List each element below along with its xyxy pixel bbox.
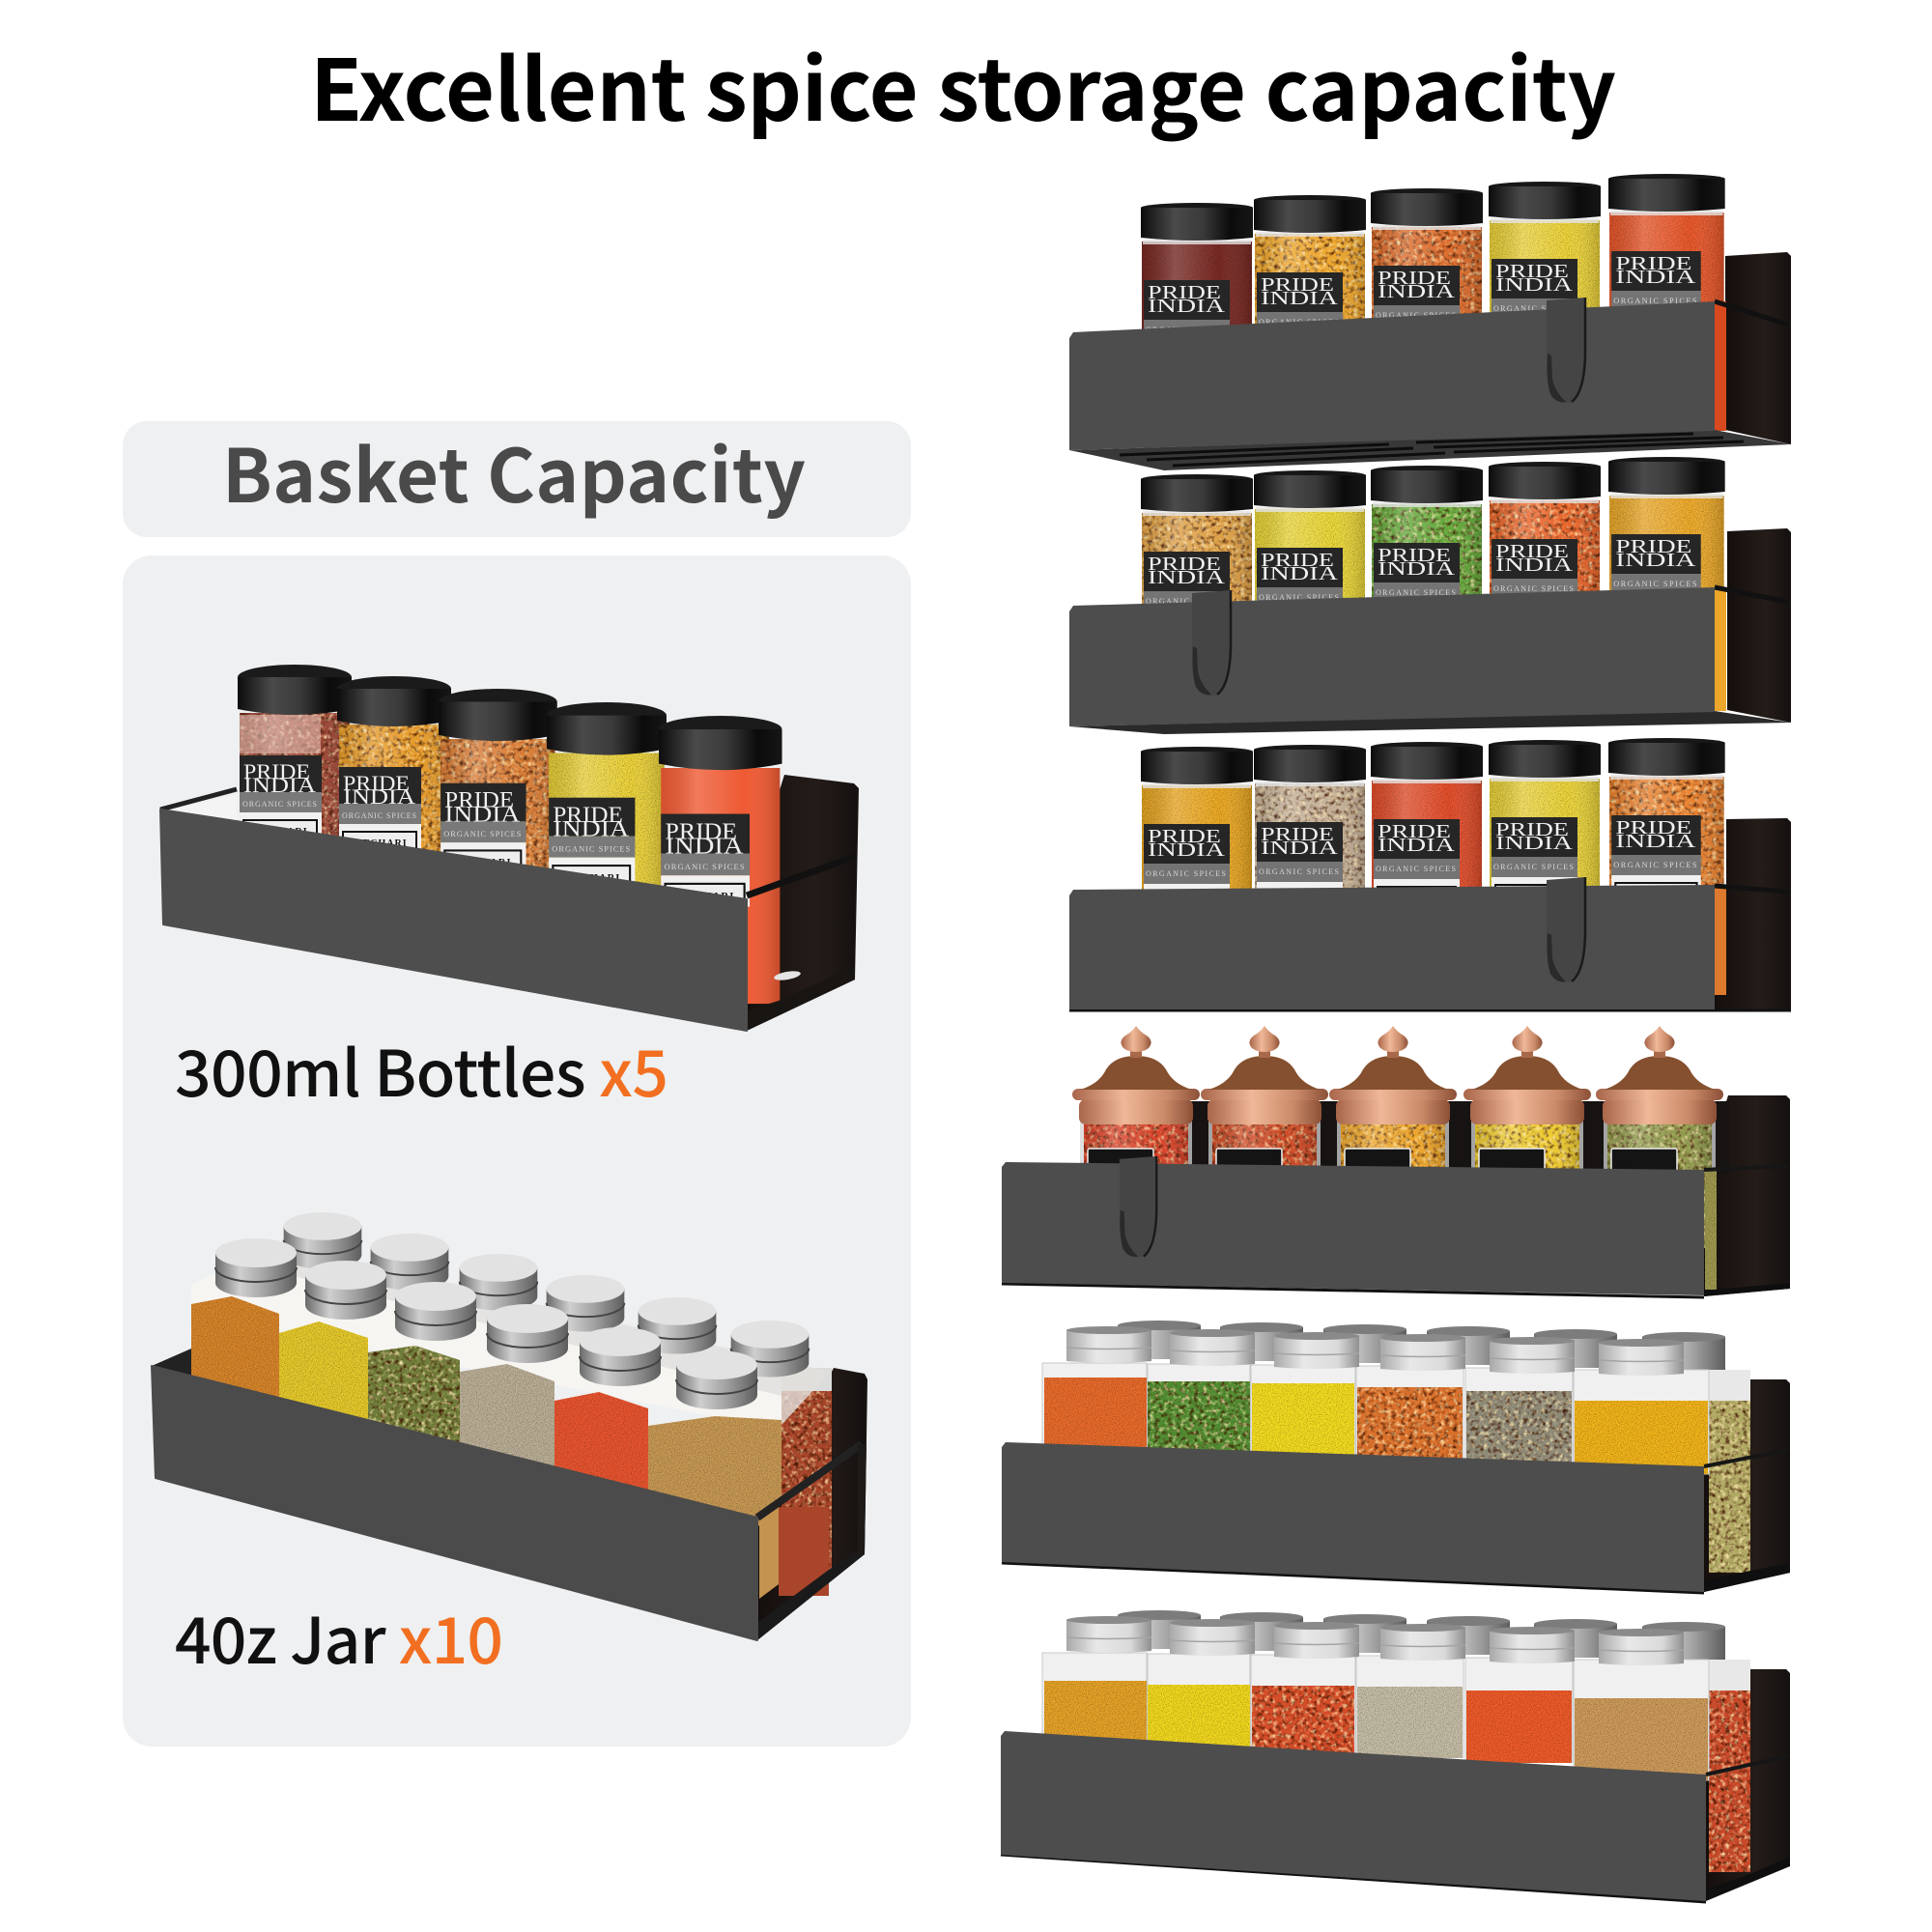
bottle: ORGANIC SPICES [1146,869,1227,878]
rack with 12 silver-lid jars [152,1212,867,1640]
bottle 5: ORGANIC SPICES [664,862,746,871]
rack E: twelve silver-lid square jars [1002,1321,1790,1593]
bottle: ORGANIC SPICES [1493,304,1575,313]
bottle 4: INDIA [553,816,629,841]
bottle: PRIDE [1615,817,1691,838]
bottle 2: ORGANIC SPICES [342,811,417,820]
bottle: PRIDE [1148,826,1221,847]
hook [1547,298,1585,403]
bottle: INDIA [1378,558,1456,580]
bottle: INDIA [1495,833,1574,854]
bottle: PRIDE [1495,261,1569,282]
bottle: INDIA [1495,274,1574,296]
bottle: ORGANIC SPICES [1146,597,1227,606]
bottle: ORGANIC SPICES [1376,311,1457,320]
bottle: KITCHARI [1624,891,1684,901]
bottle 1: PRIDE [243,759,310,783]
copper jar [1596,1026,1723,1248]
bottle 1 [238,665,352,877]
rack D: five copper-lid jars with hook [1002,1026,1790,1297]
bottle 3 [439,689,557,910]
bottle [1608,738,1725,902]
bottle: KITCHARI [1385,895,1443,905]
heading: Basket Capacity: Basket Capacity [222,417,806,524]
text: 300ml Bottles x5: 300ml Bottles x5 [175,1023,668,1116]
bottle 1: INDIA [243,773,316,797]
back row jars [280,1212,832,1577]
bottle [1141,203,1253,367]
bottle: PRIDE [1148,554,1221,575]
bottle 2 [337,676,451,889]
bottle [1608,457,1725,621]
bottle [1371,466,1483,630]
bottle: PRIDE [1378,268,1451,289]
bottle: PRIDE [1261,550,1334,571]
copper jar [1463,1026,1591,1248]
bottle: INDIA [1261,288,1339,309]
rack C: five black-lid bottles with hook [1069,738,1791,1010]
bottle 1: KITCHARI [250,827,308,838]
bottle: PRIDE [1261,274,1334,296]
bottle [1141,747,1253,911]
bottle: ORGANIC SPICES [1493,863,1575,871]
bottle 4: ORGANIC SPICES [552,844,631,853]
bottle 3: KITCHARI [452,858,512,868]
bottle [1608,174,1725,338]
bottle: ORGANIC SPICES [1376,588,1457,597]
hook [1120,1156,1156,1258]
bottle [1254,470,1366,635]
bottle 4 [547,702,667,925]
bottle: ORGANIC SPICES [1146,326,1227,334]
bottle: ORGANIC SPICES [1613,580,1698,588]
bottle: PRIDE [1615,536,1691,557]
bottle: ORGANIC SPICES [1613,861,1698,869]
bottle [1141,474,1253,639]
rack F: twelve silver-lid square jars [1001,1610,1790,1902]
copper jar [1329,1026,1457,1248]
bottle 4: PRIDE [553,802,623,827]
bottle: INDIA [1495,554,1574,576]
bottle: INDIA [1378,281,1456,302]
bottle: PRIDE [1495,541,1569,562]
back row lids [1118,1610,1725,1661]
bottle 1: ORGANIC SPICES [242,800,318,809]
bottle 2: PRIDE [343,771,410,795]
bottle: ORGANIC SPICES [1259,318,1340,327]
bottle: INDIA [1261,563,1339,584]
bottle: INDIA [1148,567,1226,588]
bottle: PRIDE [1615,253,1691,274]
bottle 3: PRIDE [444,788,514,812]
copper jar [1201,1026,1328,1248]
bottle 3: INDIA [444,802,521,826]
bottle: KITCHARI [1268,897,1326,908]
bottle [1489,462,1601,626]
bottle 5: INDIA [666,835,744,860]
bottle 3: ORGANIC SPICES [443,830,522,838]
bottle: PRIDE [1148,282,1221,303]
bottle: ORGANIC SPICES [1259,593,1340,602]
bottle: INDIA [1615,831,1696,852]
text: 4oz Jar x10: 40z Jar x10 [175,1590,503,1683]
bottle: INDIA [1615,267,1696,288]
title: Excellent spice storage capacity [310,23,1616,146]
front row jars [191,1238,781,1527]
bottle 4: KITCHARI [560,873,620,884]
bottle: INDIA [1261,838,1339,859]
bottle: ORGANIC SPICES [1613,297,1698,305]
bottle [1371,742,1483,906]
bottle: KITCHARI [1503,893,1561,903]
back row lids [1118,1321,1725,1371]
bottle: INDIA [1148,839,1226,861]
bottle [1371,188,1483,353]
bottle 5: PRIDE [666,819,737,844]
bottle [1254,195,1366,359]
bottle 2: KITCHARI [350,838,408,849]
rack B: five black-lid bottles with hook [1069,457,1791,734]
hook [1547,877,1585,982]
bottle: PRIDE [1378,821,1451,842]
panel: basket capacity heading [123,417,911,537]
bottle: PRIDE [1261,824,1334,845]
bottle 5: KITCHARI [672,891,735,902]
bottle: INDIA [1378,835,1456,856]
bottle: KITCHARI [1155,899,1213,910]
copper jar [1072,1026,1200,1248]
bottle: PRIDE [1495,819,1569,840]
bottle 5 [659,716,782,1004]
bottle: INDIA [1615,550,1696,571]
bottle: INDIA [1148,296,1226,317]
rack A: five black-lid bottles with hook [1069,174,1791,470]
bottle: PRIDE [1378,545,1451,566]
bottle [1254,745,1366,909]
bottle 2: INDIA [343,784,415,809]
front row jars [1042,1326,1709,1474]
hook [1192,590,1231,696]
bottle: ORGANIC SPICES [1376,865,1457,873]
rack with 5 black-lid bottles [160,665,859,1031]
bottle [1489,182,1601,346]
bottle: ORGANIC SPICES [1259,867,1340,876]
bottle: ORGANIC SPICES [1493,584,1575,593]
front row jars [1042,1616,1709,1780]
bottle [1489,740,1601,904]
panel: basket capacity examples [123,555,911,1747]
